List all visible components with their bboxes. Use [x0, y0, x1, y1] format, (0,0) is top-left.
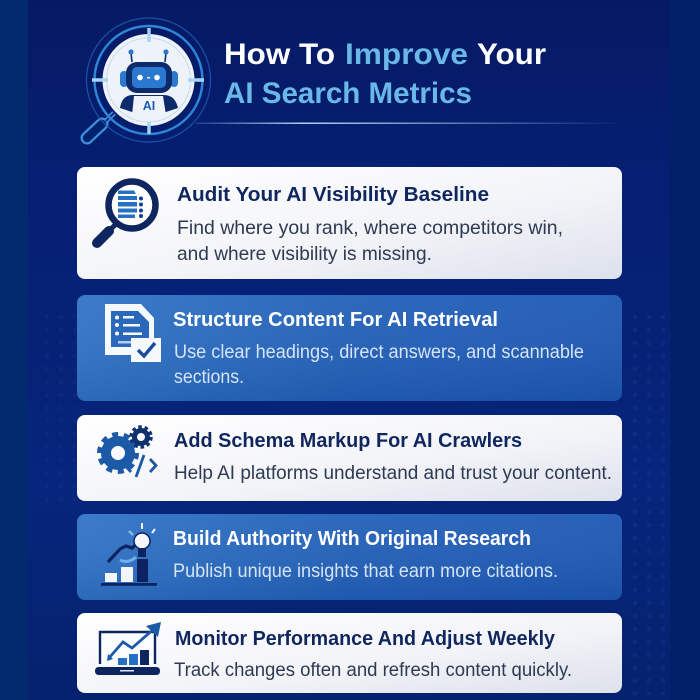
icon: crosshair ticks [92, 28, 204, 134]
panel: audit baseline [77, 167, 622, 279]
text block: and where visibility is missing. [177, 243, 432, 265]
heading: Monitor Performance And Adjust Weekly [175, 627, 556, 650]
text block: Track changes often and refresh content quickly. [174, 660, 572, 681]
icon: magnifying glass with data [97, 182, 156, 243]
text block [177, 217, 563, 265]
title [224, 38, 546, 110]
heading: Add Schema Markup For AI Crawlers [174, 429, 522, 452]
title: How To [224, 38, 335, 71]
icon: laptop with rising chart [95, 622, 161, 675]
text block: sections. [174, 367, 244, 388]
icon: gears and code [100, 427, 156, 477]
icon: robot in magnifying glass [86, 18, 210, 142]
title: Your [477, 38, 546, 71]
panel: structure content [77, 295, 622, 401]
text block: Publish unique insights that earn more citations. [173, 561, 558, 582]
icon: chart with lightbulb [101, 523, 157, 586]
title: AI Search Metrics [224, 77, 472, 110]
text block: Use clear headings, direct answers, and scannable [174, 342, 584, 363]
text block: Find where you rank, where competitors win, [177, 217, 563, 239]
heading: Structure Content For AI Retrieval [173, 308, 498, 331]
panel: build authority [77, 514, 622, 600]
icon: document with checkmark [105, 304, 161, 362]
panel: monitor performance [77, 613, 622, 693]
heading: Build Authority With Original Research [173, 527, 531, 550]
icon: robot: AI [143, 99, 155, 113]
text block: Help AI platforms understand and trust your content. [174, 463, 612, 484]
text block [174, 342, 584, 388]
title: Improve [345, 38, 468, 71]
panel: schema markup [77, 415, 622, 501]
heading: Audit Your AI Visibility Baseline [177, 183, 489, 206]
